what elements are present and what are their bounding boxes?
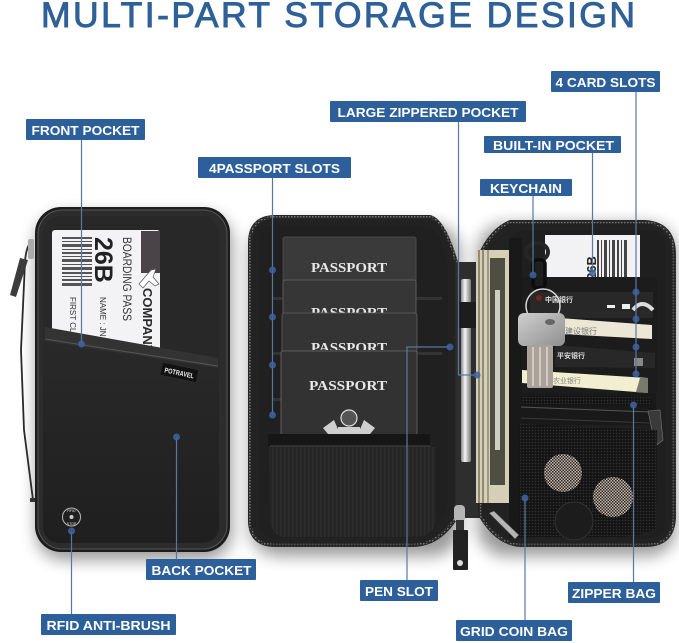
keychain bbox=[518, 243, 565, 388]
leader lines and dots bbox=[68, 92, 640, 620]
leader: card slots bbox=[632, 92, 640, 378]
card slots bbox=[522, 277, 657, 395]
leader: front pocket bbox=[78, 140, 85, 348]
label: front pocket: FRONT POCKET bbox=[32, 123, 140, 138]
lining bbox=[510, 230, 665, 538]
boarding pass: NAME : JN bbox=[98, 297, 107, 337]
card 4 bbox=[522, 370, 648, 393]
zipper slider bbox=[489, 511, 519, 539]
card 4: 农业银行 bbox=[553, 376, 581, 385]
card 3: 平安银行 bbox=[557, 351, 585, 360]
zipper bag bbox=[520, 393, 663, 445]
brand tag bbox=[160, 362, 199, 383]
passport 4 bbox=[281, 351, 417, 435]
leader: RFID bbox=[68, 528, 75, 614]
label: front pocket bbox=[26, 119, 145, 140]
leader: keychain bbox=[530, 196, 536, 278]
lower pocket bbox=[269, 447, 436, 537]
RFID logo: STOP bbox=[67, 522, 77, 526]
zipper tab bbox=[453, 505, 468, 570]
money bbox=[476, 250, 509, 503]
passport 1 bbox=[283, 237, 416, 297]
label: pen slot bbox=[360, 580, 438, 601]
label: keychain: KEYCHAIN bbox=[490, 181, 562, 196]
passport pocket band bbox=[268, 434, 430, 446]
passport 3: PASSPORT bbox=[311, 341, 388, 356]
card 1 bbox=[530, 292, 653, 318]
pen bbox=[458, 279, 477, 462]
boarding pass in pocket: 26B bbox=[584, 256, 599, 280]
open wallet: passport side bbox=[248, 215, 458, 547]
brand tag: POTRAVEL bbox=[164, 367, 195, 381]
front pocket bbox=[43, 327, 219, 543]
RFID logo bbox=[62, 508, 80, 526]
card 2 bbox=[560, 318, 652, 339]
label: back pocket: BACK POCKET bbox=[152, 563, 252, 578]
passport 2 bbox=[282, 280, 416, 313]
card 2: 建设银行 bbox=[565, 326, 597, 336]
leader: grid coin bag bbox=[522, 494, 528, 620]
label: large zippered pocket: LARGE ZIPPERED POCKET bbox=[338, 105, 519, 120]
label: large zippered pocket bbox=[330, 101, 526, 122]
open wallet: spine bbox=[453, 262, 480, 570]
boarding pass in pocket bbox=[545, 235, 640, 285]
label: RFID anti-brush bbox=[41, 614, 176, 635]
boarding pass: FIRST CLASS bbox=[68, 297, 77, 348]
label: built-in pocket: BUILT-IN POCKET bbox=[493, 138, 614, 153]
boarding pass: COMPANY bbox=[140, 288, 155, 354]
label: 4passport slots bbox=[198, 157, 351, 178]
card 1: 中国银行 bbox=[545, 295, 573, 304]
zip outer bbox=[248, 215, 458, 547]
wallet body bbox=[35, 207, 230, 552]
divider strip bbox=[509, 238, 522, 538]
zip outer bbox=[478, 220, 676, 547]
grid coin bag bbox=[519, 424, 657, 540]
label: 4passport slots: 4PASSPORT SLOTS bbox=[209, 161, 340, 176]
zipper pull and strap bbox=[10, 239, 35, 502]
leader: back pocket bbox=[173, 434, 180, 559]
passport 3 bbox=[282, 313, 417, 356]
pocket binding bbox=[45, 327, 218, 368]
passport 4: PASSPORT bbox=[309, 379, 388, 394]
label: zipper bag bbox=[568, 582, 660, 603]
leader: zipper bag bbox=[630, 402, 637, 582]
label: zipper bag: ZIPPER BAG bbox=[572, 586, 656, 601]
label: grid coin bag bbox=[456, 620, 572, 641]
closed wallet: front view bbox=[10, 207, 230, 552]
leader: passport slots bbox=[269, 178, 276, 418]
lining bbox=[258, 225, 448, 538]
passport 2: PASSPORT bbox=[311, 306, 388, 321]
boarding pass: 26B bbox=[89, 237, 117, 283]
label: pen slot: PEN SLOT bbox=[365, 584, 433, 599]
leader: pen slot bbox=[407, 344, 454, 580]
label: grid coin bag: GRID COIN BAG bbox=[460, 624, 568, 639]
slot edges bbox=[272, 297, 442, 401]
leader: built-in pocket bbox=[589, 153, 596, 276]
RFID logo: RFID bbox=[67, 509, 76, 513]
boarding pass: BOARDING PASS bbox=[120, 237, 132, 321]
passport 1: PASSPORT bbox=[311, 261, 388, 276]
label: keychain bbox=[480, 179, 572, 196]
label: RFID anti-brush: RFID ANTI-BRUSH bbox=[46, 618, 170, 633]
passport emblem bbox=[323, 410, 375, 434]
card 3 bbox=[555, 345, 655, 368]
leader: large zippered pocket bbox=[458, 122, 480, 378]
open wallet: card side bbox=[476, 220, 676, 547]
label: back pocket bbox=[146, 559, 256, 580]
label: 4 card slots bbox=[551, 71, 660, 92]
boarding pass bbox=[52, 230, 160, 355]
wallet shadows bbox=[36, 214, 676, 560]
label: 4 card slots: 4 CARD SLOTS bbox=[556, 75, 656, 90]
